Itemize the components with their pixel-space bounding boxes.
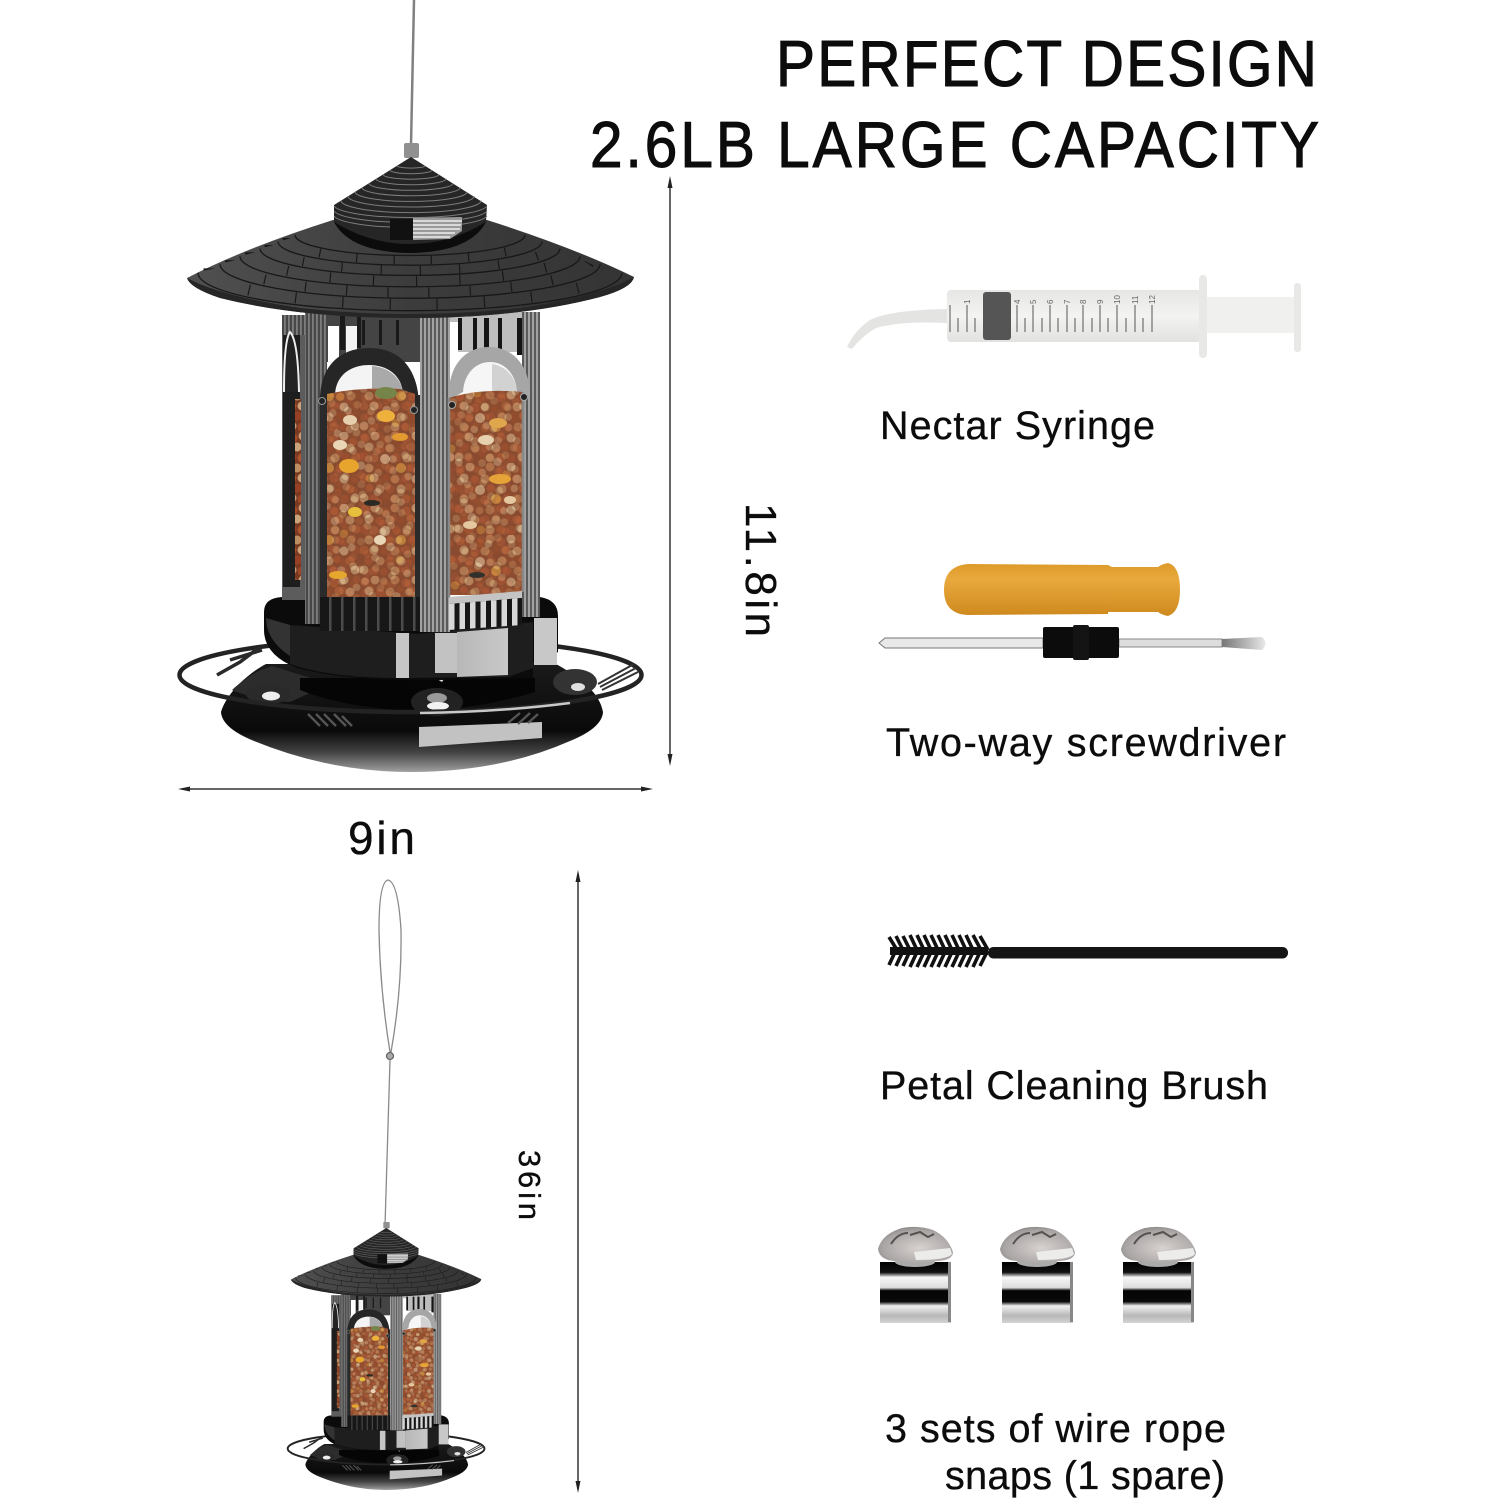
dimension label: 36in: 36in: [512, 1150, 547, 1220]
hanging wire of main feeder: [411, 0, 414, 145]
icon: nectar syringe: 7: [1063, 299, 1072, 304]
icon: nectar syringe: 12: [1148, 295, 1157, 304]
feeder body with pillars: [282, 312, 540, 632]
icon: two-way screwdriver: [879, 563, 1266, 660]
label: nectar syringe: Nectar Syringe: [880, 404, 1155, 448]
dimension arrow: hanging length 36in: [576, 870, 580, 1493]
seed highlights: [329, 387, 516, 579]
icon: nectar syringe: 5: [1029, 299, 1038, 304]
icon: nectar syringe: 6: [1046, 299, 1055, 304]
icon: petal cleaning brush: [889, 935, 1288, 967]
icon: nectar syringe: 10: [1113, 295, 1122, 304]
label: wire rope snaps: [885, 1407, 1226, 1498]
feeder base bowl: [221, 664, 603, 772]
icon: nectar syringe: 4: [1013, 299, 1022, 304]
main bird feeder illustration: [180, 143, 642, 772]
icon: wire rope snap 1: [878, 1227, 953, 1323]
label: wire rope snaps: 3 sets of wire rope: [885, 1407, 1226, 1451]
icon: wire rope snap 2: [1000, 1227, 1075, 1323]
roof cupola cap: [334, 143, 487, 253]
dimension label: 9in: 9in: [348, 812, 415, 864]
right window with seeds: [448, 347, 530, 630]
small feeder hanging on the wire: [288, 1222, 484, 1490]
label: wire rope snaps: snaps (1 spare): [945, 1454, 1225, 1498]
flower feeding ports: [246, 669, 597, 716]
title: PERFECT DESIGN: [776, 28, 1317, 101]
roof: [187, 220, 634, 318]
left window with seeds: [318, 348, 420, 631]
title: [590, 28, 1319, 182]
dimension label: 11.8in: 11.8in: [736, 503, 785, 637]
label: two-way screwdriver: Two-way screwdriver: [886, 721, 1286, 765]
dimension arrow: height 11.8in: [668, 176, 672, 766]
perch ring: [180, 638, 642, 713]
icon: nectar syringe: 9: [1096, 299, 1105, 304]
icon: wire rope snap 3: [1121, 1227, 1196, 1323]
hanging loop wire: [379, 880, 401, 1226]
icon: nectar syringe: [847, 275, 1301, 358]
icon: nectar syringe: 1: [963, 299, 972, 304]
icon: nectar syringe: 8: [1079, 299, 1088, 304]
title: 2.6LB LARGE CAPACITY: [590, 109, 1319, 182]
icon: nectar syringe: 11: [1131, 295, 1140, 304]
label: petal cleaning brush: Petal Cleaning Brush: [880, 1064, 1268, 1108]
seed tray: [264, 597, 558, 680]
dimension arrow: width 9in: [178, 786, 653, 792]
